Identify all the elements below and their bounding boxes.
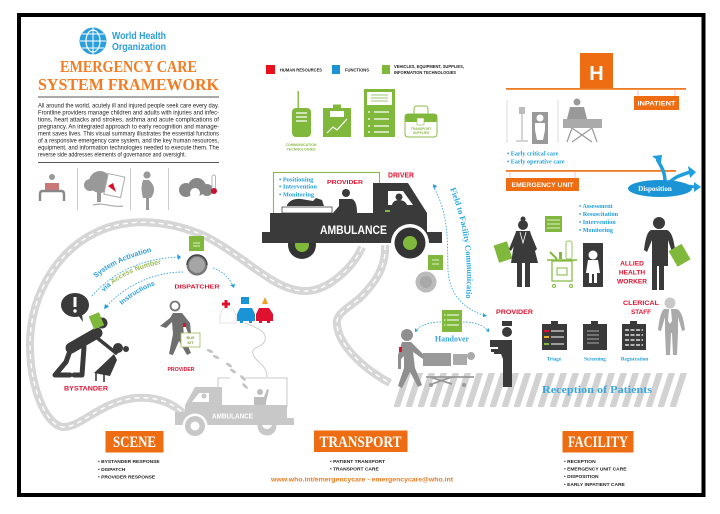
introduction text block: tions, heart attacks and strokes, asthma and acute complications of	[38, 118, 219, 124]
crosswalk reception	[399, 373, 685, 407]
title: SYSTEM FRAMEWORK	[38, 75, 220, 94]
emergency care functions list	[579, 203, 619, 234]
section: facility: • EMERGENCY UNIT CARE	[564, 466, 627, 472]
reception checklists: Registration	[621, 356, 648, 362]
footprints	[206, 348, 249, 390]
section: facility: • EARLY INPATIENT CARE	[564, 482, 626, 488]
facility provider: PROVIDER	[496, 309, 533, 316]
legend: INFORMATION TECHNOLOGIES	[394, 70, 456, 75]
ambulance in transport: DRIVER	[388, 172, 414, 180]
reception checklists: Screening	[584, 356, 606, 362]
introduction text block	[38, 96, 220, 163]
section: transport: • TRANSPORT CARE	[330, 466, 379, 472]
reception of patients label: Reception of Patients	[542, 384, 653, 396]
emergency care functions list: • Monitoring	[579, 227, 614, 234]
system activation communication: System Activation	[94, 248, 152, 278]
bystander	[55, 293, 129, 392]
website and contact: www.who.int/emergencycare - emergencycare@who.int	[270, 478, 453, 484]
nurse	[494, 216, 538, 287]
title: EMERGENCY CARE	[60, 57, 197, 76]
title	[38, 57, 220, 94]
introduction text block: ment saves lives. This visual summary illustrates the essential functions	[38, 132, 219, 138]
section: facility: FACILITY	[568, 434, 628, 451]
icon row: patient conditions	[40, 168, 217, 210]
system activation communication: Instructions	[119, 282, 155, 305]
system activation communication: via Access Number	[102, 260, 160, 291]
allied health worker: WORKER	[617, 278, 647, 286]
dispatcher: DISPATCHER	[174, 284, 220, 290]
emergency care functions list: • Intervention	[579, 219, 616, 226]
ambulance in transport: PROVIDER	[327, 180, 363, 186]
WHO logo: Organization	[112, 42, 166, 53]
icon: communication radio: COMMUNICATION	[285, 143, 317, 147]
icon: medical kit: SUPPLIES	[413, 131, 430, 135]
dispatcher	[174, 236, 220, 290]
allied health worker	[617, 217, 691, 290]
inpatient level	[506, 53, 686, 166]
scene provider on foot: PROVIDER	[167, 367, 195, 373]
section: scene: SCENE	[113, 434, 156, 451]
clerical staff: STAFF	[631, 309, 651, 316]
section: scene: • DISPATCH	[98, 467, 126, 473]
disposition arrows	[628, 155, 701, 197]
scene provider on foot: KIT	[187, 341, 194, 345]
WHO logo: World Health	[112, 31, 166, 42]
scene provider on foot	[160, 302, 200, 373]
equipment: list, cart, child on stretcher	[545, 216, 603, 288]
clerical staff	[623, 298, 685, 355]
section: facility	[562, 431, 634, 488]
inpatient level: • Early critical care	[507, 150, 559, 158]
section: transport	[314, 430, 408, 472]
reception checklists: Triage	[547, 356, 562, 362]
section: scene: • PROVIDER RESPONSE	[98, 474, 156, 480]
field to facility communication: Field to Facility Communication	[450, 187, 473, 298]
ambulance in transport	[262, 172, 442, 262]
bystander: BYSTANDER	[64, 386, 109, 392]
icon: medical kit: TRANSPORT	[411, 127, 431, 131]
system activation communication	[92, 248, 235, 309]
inpatient level: INPATIENT	[638, 102, 676, 108]
icon: medical kit	[405, 106, 437, 137]
field to facility communication	[416, 184, 487, 317]
section: facility: • RECEPTION	[564, 459, 596, 465]
introduction text block: reverse side addresses elements of governance and oversight.	[38, 152, 186, 158]
section: scene: • BYSTANDER RESPONSE	[98, 459, 160, 465]
provider handing over with stretcher	[398, 329, 475, 388]
ambulance in transport: AMBULANCE	[320, 225, 387, 237]
introduction text block: pregnancy. An integrated approach to early recognition and manage-	[38, 124, 219, 130]
allied health worker: ALLIED	[620, 260, 644, 268]
section: scene	[98, 431, 164, 480]
road: transport to facility	[337, 245, 390, 383]
ambulance in transport: • Positioning	[279, 176, 314, 184]
section: transport: TRANSPORT	[320, 434, 402, 451]
emergency care functions list: • Assessment	[579, 203, 614, 210]
road: scene to transport	[30, 222, 362, 427]
introduction text block: equipment, and information technologies needed to execute them. The	[38, 146, 220, 152]
emergency unit level	[506, 170, 676, 191]
reception checklists	[542, 321, 648, 362]
scene provider on foot: BUS	[186, 336, 195, 340]
handover: Handover	[435, 334, 470, 344]
legend: FUNCTIONS	[345, 68, 369, 72]
handover	[415, 310, 489, 344]
emergency vehicles	[220, 297, 273, 377]
legend: VEHICLES, EQUIPMENT, SUPPLIES,	[394, 64, 464, 69]
section: facility: • DISPOSITION	[564, 474, 599, 480]
clerical staff: CLERICAL	[623, 300, 659, 307]
WHO logo	[80, 27, 166, 55]
inpatient level: • Early operative care	[507, 158, 565, 166]
icon: protocol document	[364, 89, 395, 137]
ambulance in transport: • Intervention	[279, 184, 317, 190]
introduction text block: of a responsive emergency care system, and the key human resources,	[38, 138, 219, 144]
emergency unit level: EMERGENCY UNIT	[512, 183, 574, 189]
disposition arrows: Disposition	[638, 185, 672, 193]
icon: clipboard chart	[323, 104, 351, 137]
introduction text block: All around the world, acutely ill and injured people seek care every day.	[38, 104, 219, 110]
inpatient level: H	[589, 63, 604, 85]
facility provider	[490, 309, 533, 387]
icon: communication radio: TECHNOLOGIES	[287, 148, 316, 152]
section: transport: • PATIENT TRANSPORT	[330, 459, 385, 465]
icon: communication radio	[285, 91, 317, 152]
ambulance at scene, grey: AMBULANCE	[212, 414, 253, 420]
legend	[266, 64, 464, 75]
emergency care functions list: • Resuscitation	[579, 211, 619, 218]
allied health worker: HEALTH	[619, 270, 645, 276]
ambulance in transport: • Monitoring	[279, 192, 315, 198]
legend: HUMAN RESOURCES	[280, 68, 322, 72]
introduction text block: Frontline providers manage children and adults with injuries and infec-	[38, 110, 219, 116]
ambulance at scene, grey	[175, 378, 294, 438]
